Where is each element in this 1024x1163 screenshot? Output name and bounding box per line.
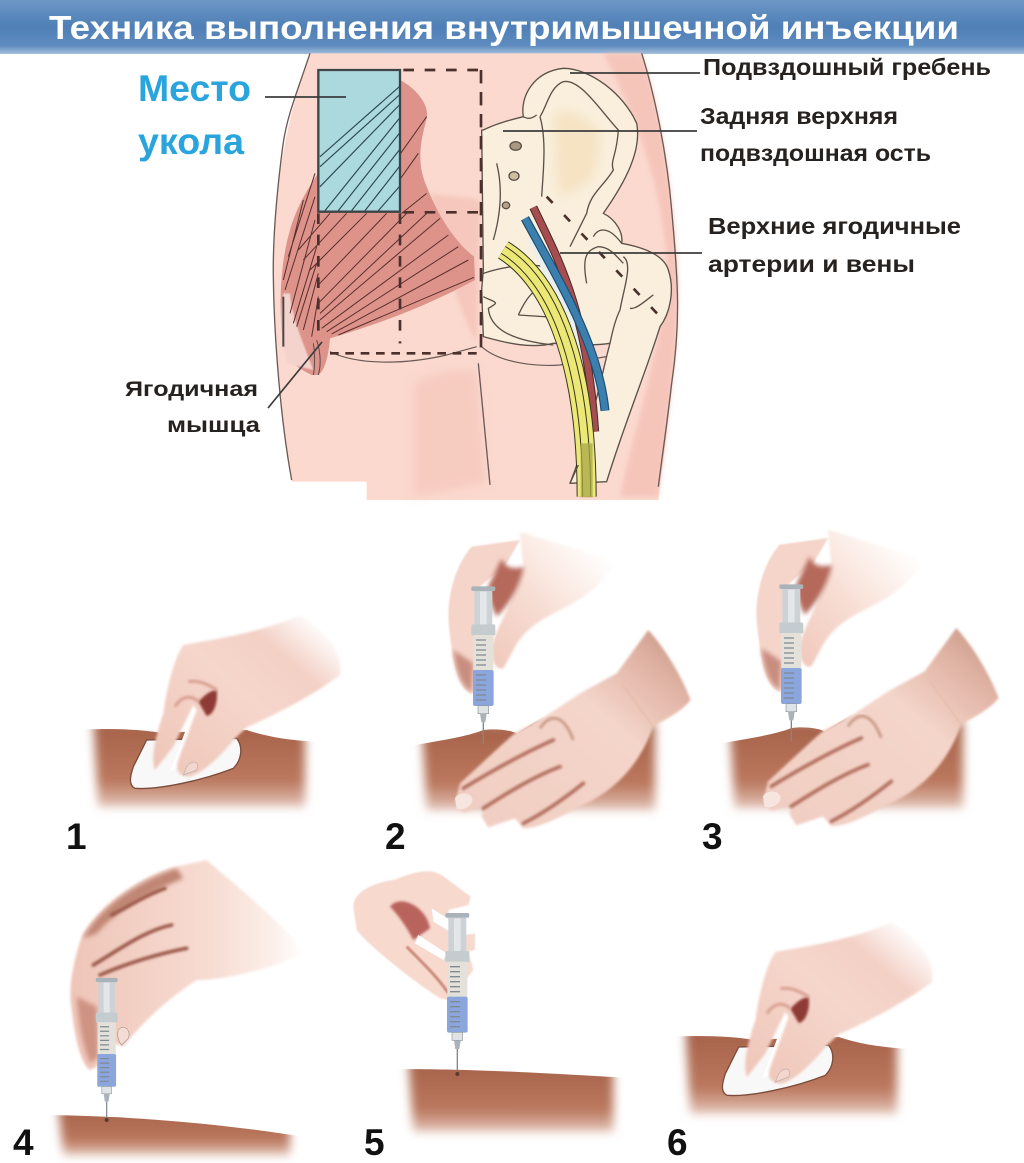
anatomy diagram: gluteal region <box>265 53 702 500</box>
label: superior gluteal arteries and veins: артерии и вены <box>708 251 915 277</box>
body silhouette <box>273 53 678 500</box>
label: superior gluteal arteries and veins <box>708 213 961 277</box>
title banner <box>0 0 1024 54</box>
step 3: insert the needle <box>702 530 999 857</box>
label: gluteal muscle: Ягодичная <box>125 378 258 401</box>
illustration: hand with swab <box>685 922 932 1114</box>
label: gluteal muscle <box>125 378 260 437</box>
step number 1: 1 <box>66 816 87 857</box>
label: injection site <box>138 68 251 162</box>
label: gluteal muscle: мышца <box>167 414 260 437</box>
illustration: hands with syringe <box>422 532 691 828</box>
injection site quadrant <box>318 70 400 212</box>
dashed guide lines <box>318 70 662 353</box>
label: posterior superior iliac spine <box>700 103 931 166</box>
illustration: hand with swab <box>93 615 340 807</box>
gluteal muscle <box>281 70 475 375</box>
step 2: stretch skin and position syringe <box>385 532 691 857</box>
step number 5: 5 <box>364 1122 385 1163</box>
illustration: hands with syringe <box>730 530 999 826</box>
step number 2: 2 <box>385 816 406 857</box>
step 5: withdraw the needle <box>353 871 613 1163</box>
step number 4: 4 <box>13 1122 34 1163</box>
label: posterior superior iliac spine: Задняя верхняя <box>700 103 898 129</box>
label: posterior superior iliac spine: подвздошная ость <box>700 140 931 166</box>
pelvis and femur bones <box>482 68 671 483</box>
step 4: inject the medication <box>13 860 305 1163</box>
label: superior gluteal arteries and veins: Верхние ягодичные <box>708 213 961 239</box>
title banner: Техника выполнения внутримышечной инъекции <box>49 9 959 46</box>
label: injection site: Место <box>138 68 251 109</box>
illustration: hand pressing plunger <box>58 860 305 1155</box>
step number 6: 6 <box>667 1122 688 1163</box>
step 1: swab the skin <box>66 615 340 857</box>
sciatic nerve and superior gluteal vessels <box>503 207 605 497</box>
step 6: swab the injection site <box>667 922 932 1163</box>
leader lines <box>265 73 702 408</box>
illustration: hand withdrawing syringe <box>353 871 613 1132</box>
label: iliac crest: Подвздошный гребень <box>703 54 991 80</box>
label: injection site: укола <box>138 121 244 162</box>
step number 3: 3 <box>702 816 723 857</box>
